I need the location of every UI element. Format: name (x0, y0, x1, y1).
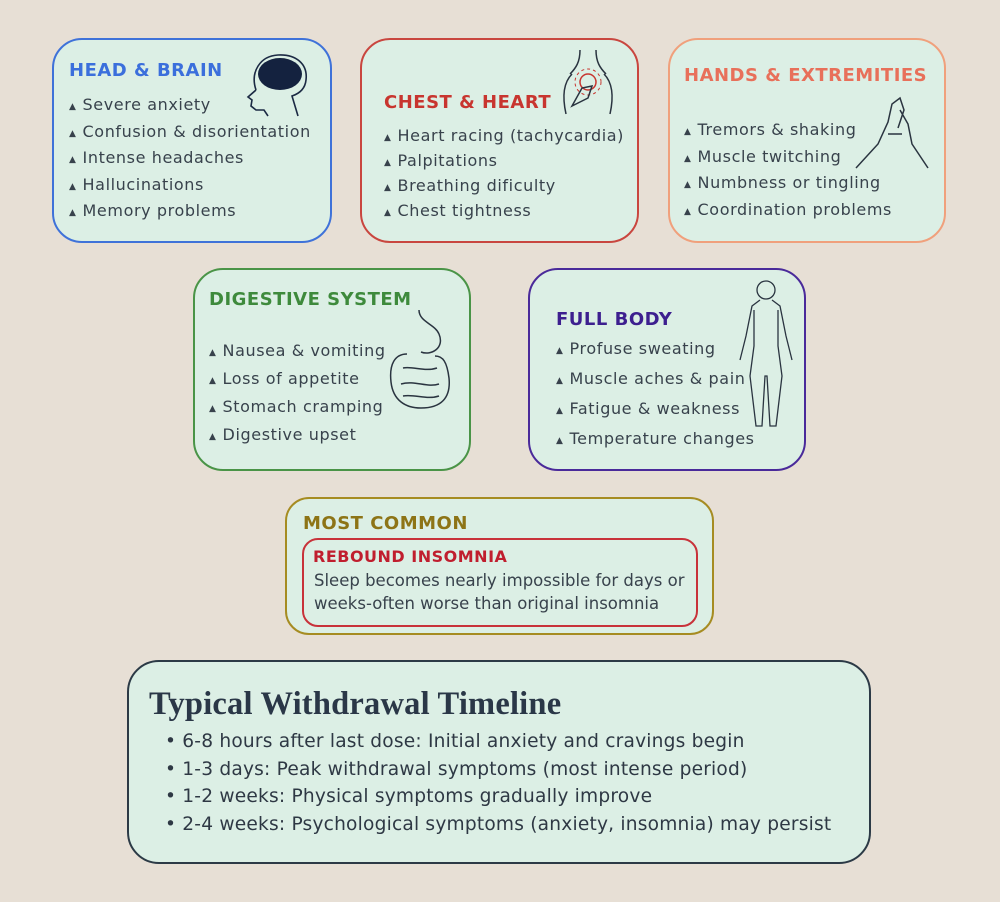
list: digestive symptoms: ▲ Stomach cramping (209, 397, 383, 416)
list: head symptoms: ▲ Hallucinations (69, 174, 204, 194)
list: hands symptoms: ▲ Tremors & shaking (684, 120, 856, 139)
list: digestive symptoms (209, 341, 386, 444)
panel: head & brain (52, 38, 332, 243)
list: full body symptoms: ▲ Profuse sweating (556, 339, 716, 358)
list: digestive symptoms: ▲ Loss of appetite (209, 369, 360, 388)
list: full body symptoms: ▲ Fatigue & weakness (556, 399, 740, 418)
list: chest symptoms: ▲ Heart racing (tachycardia) (384, 126, 624, 145)
list: chest symptoms: ▲ Palpitations (384, 151, 498, 170)
list: timeline: • 2-4 weeks: Psychological symptoms (anxiety, insomnia) may persist (165, 814, 831, 834)
icon: intestines (390, 310, 450, 409)
list: timeline: • 1-2 weeks: Physical symptoms gradually improve (165, 786, 652, 807)
list: head symptoms: ▲ Severe anxiety (69, 95, 211, 114)
heading: head & brain: HEAD & BRAIN (69, 60, 223, 81)
heading: digestive: DIGESTIVE SYSTEM (209, 289, 412, 310)
list: chest symptoms: ▲ Breathing dificulty (384, 176, 556, 195)
list: hands symptoms (684, 120, 892, 218)
list: hands symptoms: ▲ Muscle twitching (684, 146, 841, 166)
list: head symptoms: ▲ Confusion & disorientation (69, 122, 311, 140)
heading: full body: FULL BODY (556, 309, 672, 330)
panel: full body (528, 268, 806, 471)
list: timeline (165, 731, 831, 834)
heading: chest & heart: CHEST & HEART (384, 92, 551, 113)
heading: most common: MOST COMMON (303, 513, 468, 534)
icon: brain (246, 54, 308, 116)
list: hands symptoms: ▲ Coordination problems (684, 200, 892, 218)
list: hands symptoms: ▲ Numbness or tingling (684, 173, 881, 192)
icon: body (739, 280, 793, 427)
text: insomnia description (314, 571, 685, 613)
text: insomnia description: Sleep becomes nearly impossible for days or (314, 571, 684, 590)
list: digestive symptoms: ▲ Digestive upset (209, 425, 356, 444)
list: chest symptoms: ▲ Chest tightness (384, 201, 531, 220)
list: digestive symptoms: ▲ Nausea & vomiting (209, 341, 386, 360)
heading: rebound insomnia: REBOUND INSOMNIA (313, 547, 507, 566)
list: head symptoms: ▲ Intense headaches (69, 148, 244, 167)
list: full body symptoms: ▲ Temperature changes (556, 429, 755, 448)
heading: hands: HANDS & EXTREMITIES (684, 65, 927, 86)
panel: hands & extremities (668, 38, 946, 243)
icon: hands (856, 96, 929, 168)
list: head symptoms: ▲ Memory problems (69, 201, 236, 220)
panel: chest & heart (360, 38, 639, 243)
list: timeline: • 6-8 hours after last dose: Initial anxiety and cravings begin (165, 731, 745, 752)
heading: timeline: Typical Withdrawal Timeline (149, 686, 561, 722)
list: timeline: • 1-3 days: Peak withdrawal symptoms (most intense period) (165, 758, 747, 780)
list: full body symptoms (556, 339, 755, 448)
panel: most common (285, 497, 714, 635)
text: insomnia description: weeks-often worse than original insomnia (314, 594, 659, 613)
panel: timeline (127, 660, 871, 864)
list: head symptoms (69, 95, 311, 220)
list: chest symptoms (384, 126, 624, 220)
callout: rebound insomnia (302, 538, 698, 627)
list: full body symptoms: ▲ Muscle aches & pain (556, 369, 746, 388)
icon: chest (563, 50, 613, 114)
panel: digestive system (193, 268, 471, 471)
